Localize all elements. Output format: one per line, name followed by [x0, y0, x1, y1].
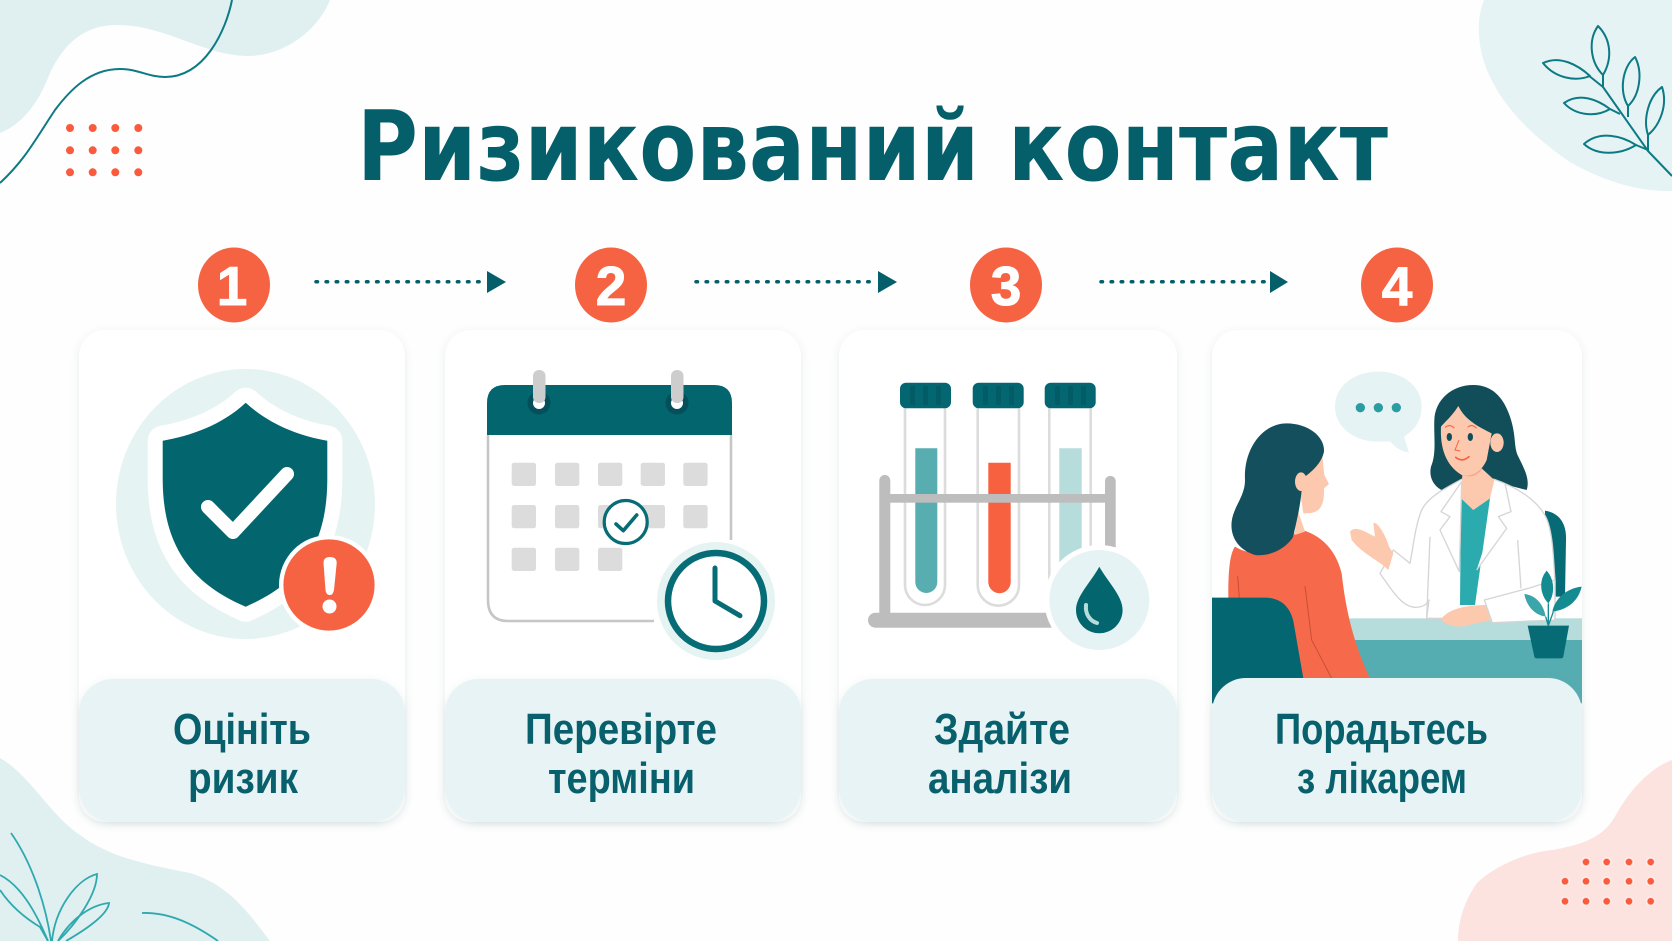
step badge 1 — [198, 248, 270, 322]
decoration: bottom-right blob with dots — [1458, 760, 1672, 941]
caption box — [445, 679, 801, 822]
step badge 2 — [575, 248, 647, 322]
decoration: top-left blob and curve — [0, 0, 330, 183]
doctor — [1350, 385, 1555, 627]
panel: step 3 take tests — [839, 330, 1177, 822]
caption text: з лікарем — [1297, 754, 1467, 803]
panel: step 4 consult doctor — [1212, 330, 1585, 822]
decoration: bottom-left blob with plant lines — [0, 758, 270, 941]
step badge 3 — [970, 248, 1042, 322]
caption box — [1212, 678, 1582, 822]
step badge 2: 2 — [596, 255, 626, 317]
caption text: Здайте — [934, 705, 1070, 754]
patient — [1228, 423, 1370, 703]
doctor chair — [1545, 511, 1566, 597]
step badge 4: 4 — [1382, 255, 1413, 317]
decoration: top-right blob and branch — [1479, 0, 1672, 191]
step badge 4 — [1361, 248, 1433, 322]
icon: calendar with clock — [487, 370, 775, 660]
title: Ризикований контакт — [357, 90, 1388, 203]
illustration: patient and doctor at desk — [1212, 372, 1585, 703]
decoration: top-left dots — [66, 124, 142, 176]
arrow 2 to 3 — [696, 271, 897, 293]
arrow 3 to 4 — [1101, 271, 1288, 293]
icon: test tubes in rack with blood drop — [868, 383, 1154, 655]
desk — [1348, 618, 1585, 703]
caption box — [839, 679, 1177, 822]
caption text: Оцініть — [173, 705, 311, 754]
caption box — [79, 679, 405, 822]
caption text: Порадьтесь — [1275, 705, 1488, 754]
patient chair — [1212, 598, 1303, 703]
caption text: терміни — [548, 754, 695, 803]
speech bubble — [1335, 372, 1422, 453]
step badge 3: 3 — [991, 255, 1021, 317]
panel: step 1 assess risk — [79, 330, 405, 822]
step badge 1: 1 — [217, 255, 247, 317]
arrow 1 to 2 — [316, 271, 506, 293]
caption text: ризик — [188, 754, 299, 803]
panel: step 2 check dates — [445, 330, 801, 822]
icon: shield with check and alert — [116, 369, 379, 639]
caption text: аналізи — [928, 754, 1072, 803]
caption text: Перевірте — [525, 705, 717, 754]
potted plant — [1524, 571, 1582, 658]
